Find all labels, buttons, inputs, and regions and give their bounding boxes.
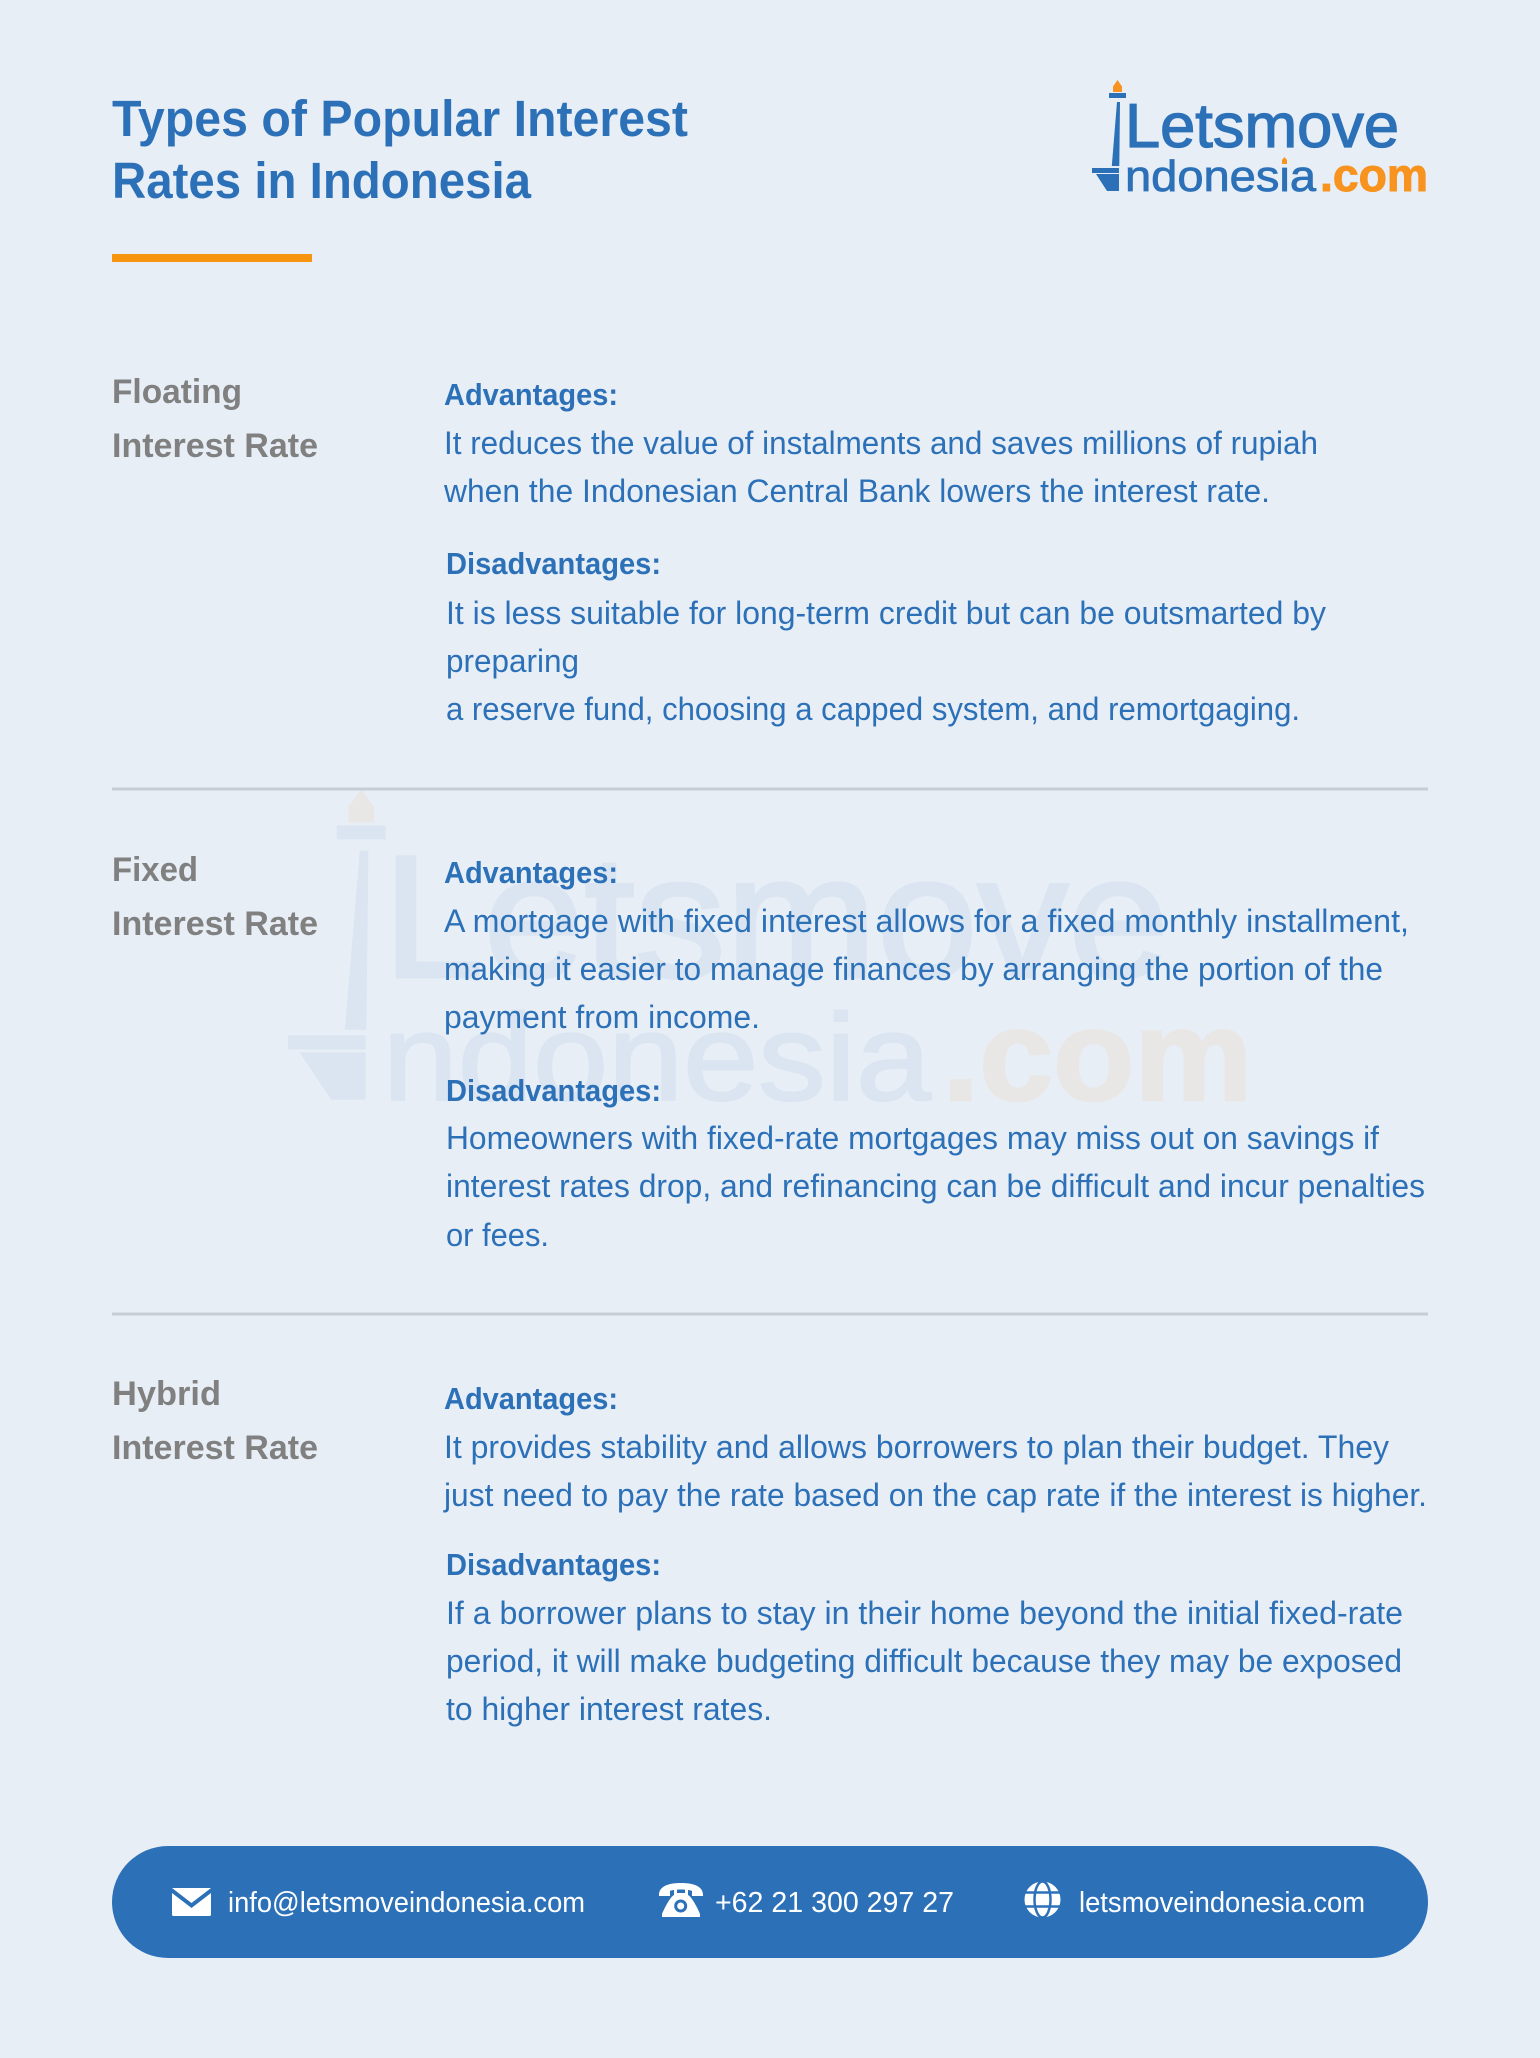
heading: fixed interest rate: Interest Rate	[112, 905, 318, 943]
footer contact bar	[112, 1846, 1428, 1958]
hybrid disadvantages text: period, it will make budgeting difficult because they may be exposed	[446, 1643, 1402, 1679]
email address: info@letsmoveindonesia.com	[228, 1887, 585, 1919]
fixed disadvantages text: Homeowners with fixed-rate mortgages may miss out on savings if	[446, 1120, 1379, 1156]
fixed advantages text: making it easier to manage finances by arranging the portion of the	[444, 951, 1383, 987]
hybrid disadvantages text: to higher interest rates.	[446, 1691, 772, 1727]
hybrid disadvantages text: Disadvantages:	[446, 1547, 661, 1582]
fixed advantages text	[444, 855, 1409, 1035]
icon: telephone	[659, 1883, 703, 1917]
heading: floating interest rate	[112, 373, 318, 465]
floating disadvantages text: It is less suitable for long-term credit but can be outsmarted by	[446, 595, 1326, 631]
logo: .com	[1320, 149, 1428, 201]
icon: globe	[1024, 1882, 1060, 1918]
heading: hybrid interest rate: Hybrid	[112, 1375, 221, 1413]
hybrid advantages text: just need to pay the rate based on the cap rate if the interest is higher.	[443, 1477, 1427, 1513]
floating advantages text: Advantages:	[444, 377, 618, 412]
fixed disadvantages text: interest rates drop, and refinancing can be difficult and incur penalties	[446, 1168, 1425, 1204]
heading: fixed interest rate: Fixed	[112, 851, 198, 889]
floating disadvantages text	[446, 546, 1326, 727]
watermark logo: .com	[942, 983, 1252, 1127]
hybrid advantages text: It provides stability and allows borrowers to plan their budget. They	[444, 1429, 1389, 1465]
watermark logo: ndonesia	[383, 989, 932, 1126]
fixed advantages text: A mortgage with fixed interest allows for a fixed monthly installment,	[444, 903, 1409, 939]
hybrid advantages text	[443, 1381, 1427, 1513]
hybrid disadvantages text	[446, 1547, 1403, 1727]
title	[112, 90, 688, 209]
panel: hybrid interest rate	[112, 1375, 1427, 1727]
watermark logo	[288, 789, 1252, 1127]
fixed advantages text: payment from income.	[444, 999, 760, 1035]
watermark logo: Letsmove	[383, 821, 1169, 1014]
hybrid advantages text: Advantages:	[444, 1381, 618, 1416]
heading: floating interest rate: Floating	[112, 373, 242, 411]
heading: floating interest rate: Interest Rate	[112, 427, 318, 465]
heading: hybrid interest rate	[112, 1375, 318, 1467]
icon: envelope	[172, 1888, 211, 1916]
website address: letsmoveindonesia.com	[1079, 1887, 1365, 1919]
phone number: +62 21 300 297 27	[715, 1887, 954, 1919]
logo: Letsmove	[1125, 92, 1399, 161]
floating disadvantages text: a reserve fund, choosing a capped system, and remortgaging.	[446, 691, 1300, 727]
fixed disadvantages text	[446, 1073, 1425, 1253]
fixed disadvantages text: Disadvantages:	[446, 1073, 661, 1108]
panel: floating interest rate	[112, 373, 1326, 727]
title accent bar	[112, 254, 312, 262]
panel: fixed interest rate	[112, 851, 1425, 1253]
floating advantages text: It reduces the value of instalments and saves millions of rupiah	[444, 425, 1318, 461]
title: Types of Popular Interest	[112, 90, 688, 147]
floating advantages text: when the Indonesian Central Bank lowers the interest rate.	[443, 473, 1270, 509]
logo	[1092, 80, 1428, 201]
logo: ndonesia	[1125, 152, 1317, 201]
title: Rates in Indonesia	[112, 152, 532, 209]
heading: hybrid interest rate: Interest Rate	[112, 1429, 318, 1467]
fixed advantages text: Advantages:	[444, 855, 618, 890]
floating advantages text	[443, 377, 1318, 509]
fixed disadvantages text: or fees.	[446, 1217, 549, 1253]
hybrid disadvantages text: If a borrower plans to stay in their home beyond the initial fixed-rate	[446, 1595, 1403, 1631]
heading: fixed interest rate	[112, 851, 318, 943]
floating disadvantages text: Disadvantages:	[446, 546, 661, 581]
floating disadvantages text: preparing	[446, 643, 579, 679]
